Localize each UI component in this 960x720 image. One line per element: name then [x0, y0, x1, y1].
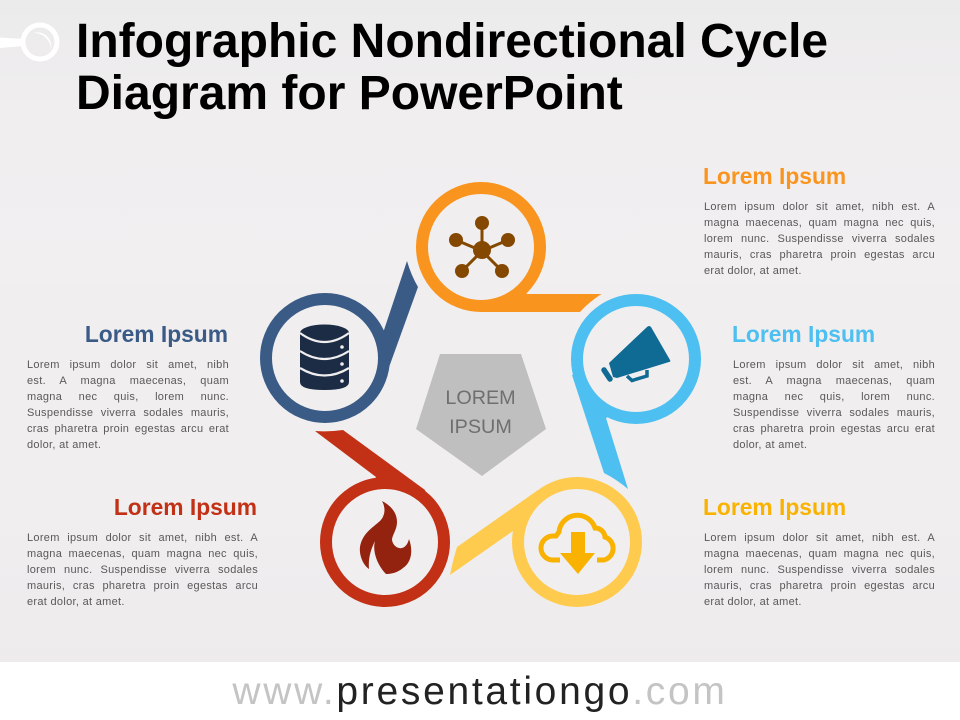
title [76, 15, 828, 120]
center pentagon: LOREM [445, 387, 516, 409]
text: magna maecenas, quam magna nec quis, [27, 548, 258, 560]
text block: navy [27, 321, 229, 451]
text: magna maecenas, quam magna nec quis, [704, 548, 935, 560]
text: Lorem ipsum dolor sit amet, nibh est. A [704, 201, 935, 213]
text block: red [27, 494, 258, 608]
icon: megaphone [604, 326, 670, 380]
text: Lorem ipsum dolor sit amet, nibh est. A [27, 532, 258, 544]
text: erat dolor, at amet. [704, 596, 802, 608]
center pentagon: IPSUM [449, 416, 512, 438]
text: Lorem ipsum dolor sit amet, nibh [27, 359, 229, 371]
text: mauris, cras pharetra proin egestas arcu [704, 580, 935, 592]
icon: flame [360, 501, 411, 574]
text: magna nec quis, lorem nunc. [27, 391, 229, 403]
text: dolor, at amet. [27, 439, 101, 451]
text: est. A magna maecenas, quam [27, 375, 229, 387]
icon: white ring logo [0, 25, 57, 59]
text: Lorem Ipsum [703, 163, 846, 189]
text: lorem nunc. Suspendisse viverra sodales [27, 564, 258, 576]
text: Lorem Ipsum [85, 321, 228, 347]
node: orange network [422, 188, 602, 312]
center pentagon [416, 354, 546, 476]
text: Suspendisse viverra sodales mauris, [27, 407, 229, 419]
text: Lorem ipsum dolor sit amet, nibh [733, 359, 935, 371]
text: lorem nunc. Suspendisse viverra sodales [704, 233, 935, 245]
text: Lorem Ipsum [703, 494, 846, 520]
node: red flame [315, 430, 444, 601]
text block: orange [703, 163, 935, 277]
text: lorem nunc. Suspendisse viverra sodales [704, 564, 935, 576]
icon: network [449, 216, 515, 278]
text: magna maecenas, quam magna nec quis, [704, 217, 935, 229]
text: mauris, cras pharetra proin egestas arcu [27, 580, 258, 592]
node: light blue megaphone [572, 300, 695, 489]
text: est. A magna maecenas, quam [733, 375, 935, 387]
text: Lorem Ipsum [732, 321, 875, 347]
text: mauris, cras pharetra proin egestas arcu [704, 249, 935, 261]
node: yellow cloud download [450, 483, 636, 601]
text: Lorem Ipsum [114, 494, 257, 520]
icon: cloud download [541, 515, 613, 574]
icon: database [300, 324, 349, 390]
footer url: www.presentationgo.com [232, 670, 728, 713]
text: erat dolor, at amet. [27, 596, 125, 608]
text: dolor, at amet. [733, 439, 807, 451]
title: Infographic Nondirectional Cycle [76, 15, 828, 68]
node: navy database [266, 261, 418, 417]
text: cras pharetra proin egestas arcu erat [733, 423, 935, 435]
text: Lorem ipsum dolor sit amet, nibh est. A [704, 532, 935, 544]
text block: yellow [703, 494, 935, 608]
text: erat dolor, at amet. [704, 265, 802, 277]
text: Suspendisse viverra sodales mauris, [733, 407, 935, 419]
title: Diagram for PowerPoint [76, 67, 623, 120]
text block: light blue [732, 321, 935, 451]
text: cras pharetra proin egestas arcu erat [27, 423, 229, 435]
text: magna nec quis, lorem nunc. [733, 391, 935, 403]
